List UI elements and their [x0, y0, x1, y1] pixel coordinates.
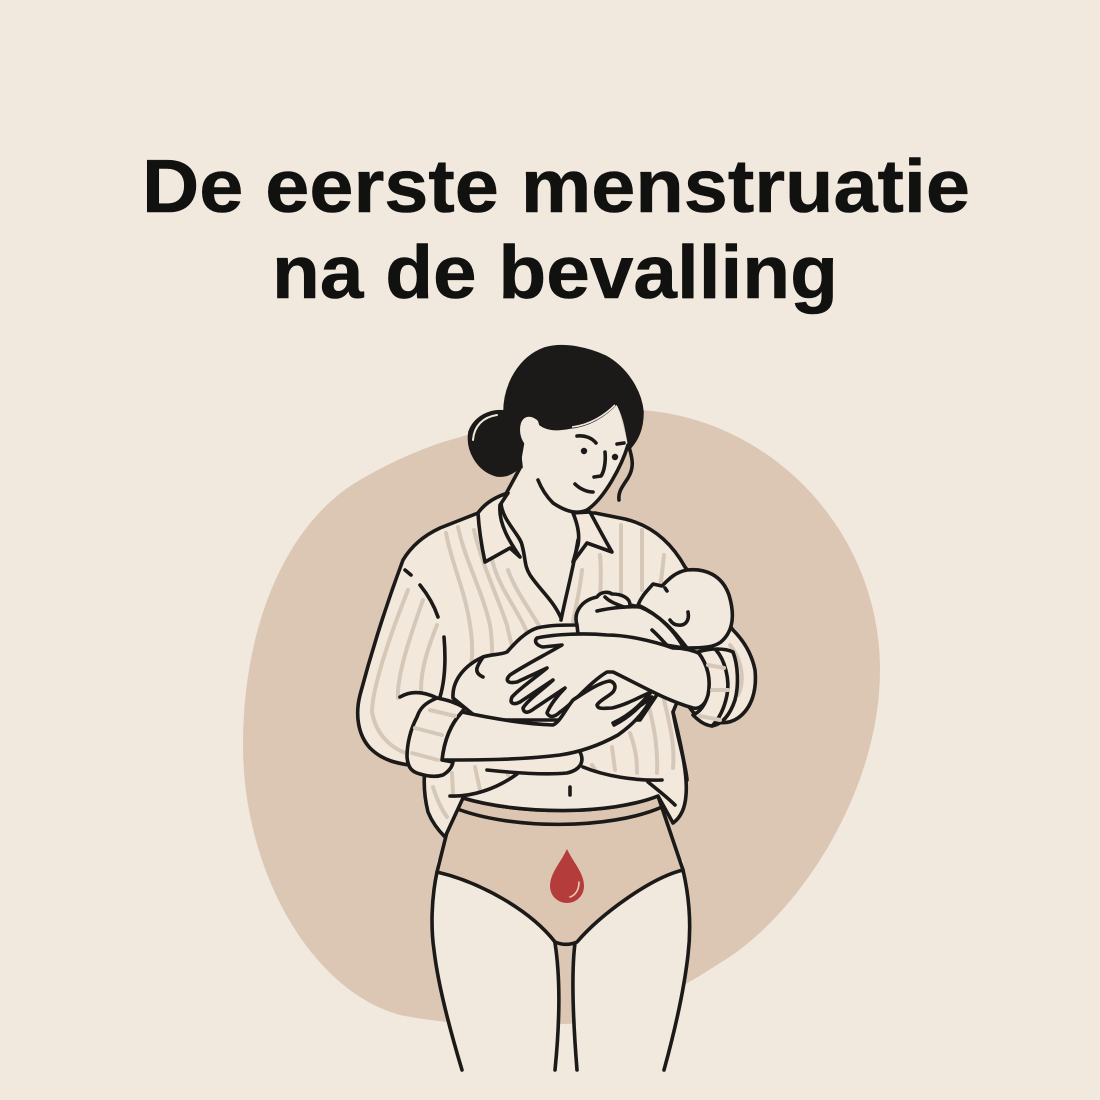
- background blob: [243, 409, 880, 1025]
- sleeve creases: [400, 570, 687, 780]
- loose hair strand: [619, 447, 632, 500]
- baby head: [638, 570, 732, 648]
- shirt stripes: [372, 525, 742, 817]
- legs: [432, 860, 690, 1070]
- hair bun: [470, 412, 530, 475]
- left cuff: [407, 698, 465, 776]
- shirt: [358, 500, 755, 837]
- collar: [478, 493, 612, 562]
- neck and chest: [500, 468, 578, 620]
- underwear: [437, 796, 683, 944]
- facial features: [577, 436, 596, 443]
- her upper arm and hand: [507, 634, 711, 716]
- ear: [520, 417, 545, 450]
- title: De eerste menstruatie: [142, 144, 970, 228]
- title: [142, 144, 970, 314]
- head: [470, 347, 642, 512]
- blood drop: [550, 849, 584, 903]
- belly and shirt knot: [450, 750, 675, 811]
- face: [520, 402, 628, 512]
- baby: [453, 570, 732, 720]
- swaddled body: [453, 607, 687, 720]
- her lower arm and hand: [442, 681, 652, 760]
- title: na de bevalling: [272, 230, 838, 314]
- baby arm and fist: [576, 592, 684, 648]
- right cuff: [693, 649, 737, 726]
- hair: [505, 347, 642, 467]
- illustration: mother holding baby: [358, 347, 755, 1070]
